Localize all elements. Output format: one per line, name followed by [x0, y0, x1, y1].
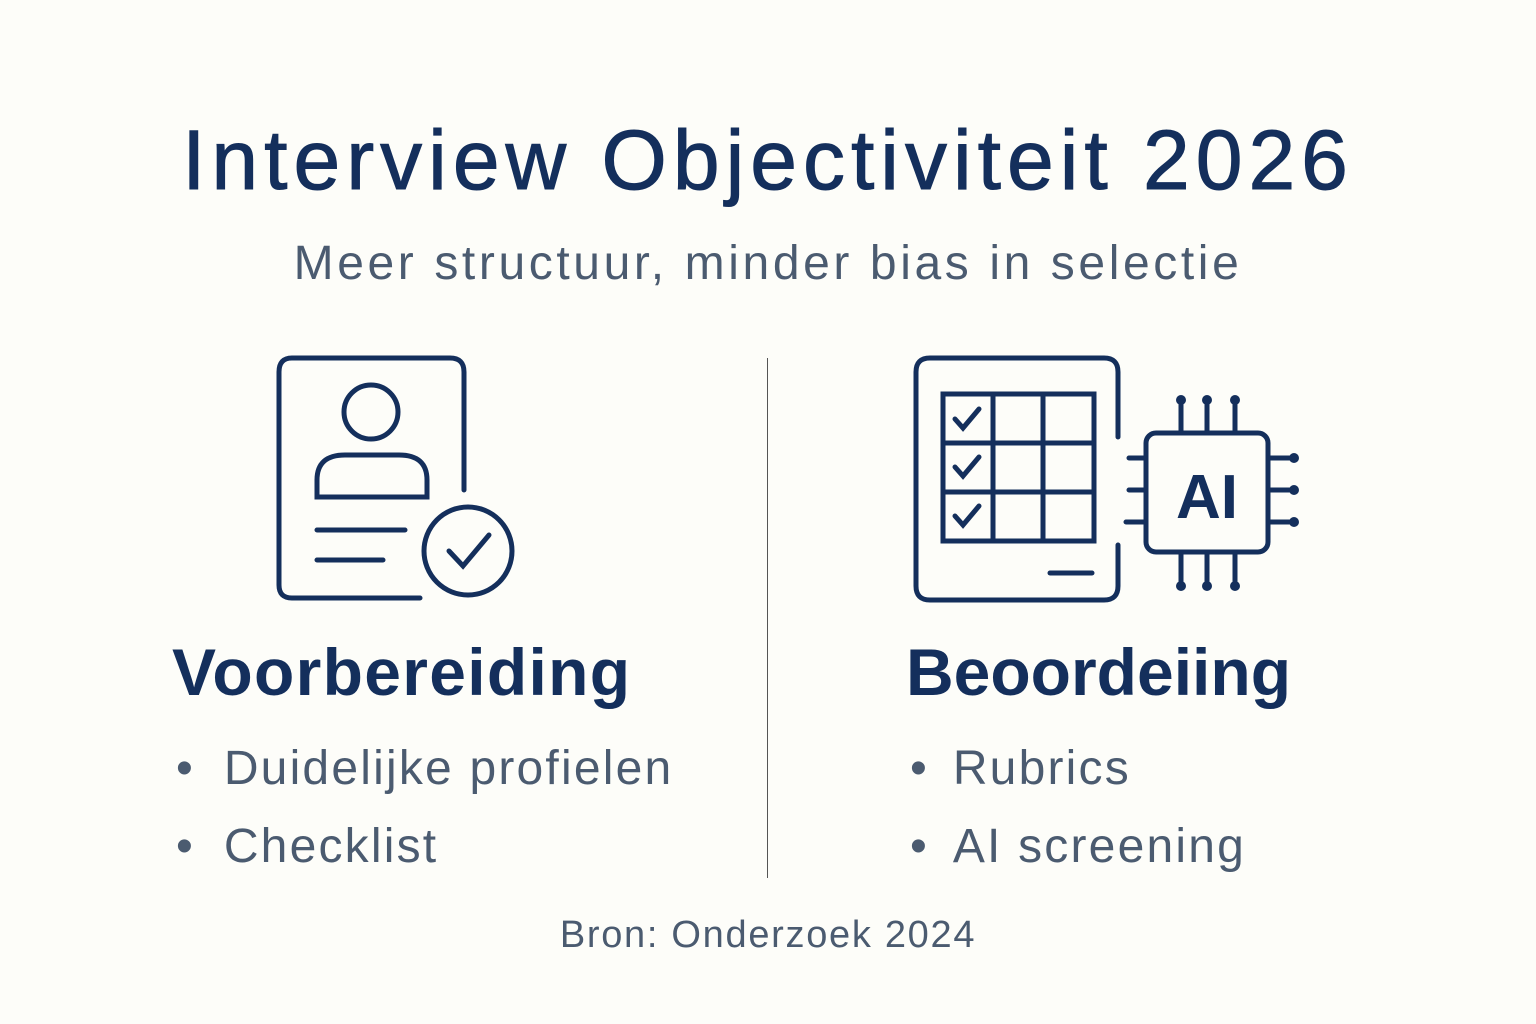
icon: rubric tablet with AI chip	[914, 356, 1299, 602]
list: left	[176, 742, 673, 873]
subtitle: Meer structuur, minder bias in selectie	[294, 237, 1242, 290]
heading: Beoordeiing: Beoordeiing	[906, 635, 1291, 709]
list: right: • Rubrics	[910, 742, 1131, 795]
list: left: • Checklist	[176, 820, 438, 873]
icon: profile document with check	[276, 356, 514, 600]
heading: Voorbereiding: Voorbereiding	[172, 635, 631, 709]
list: left: • Duidelijke profielen	[176, 742, 673, 795]
list: right	[910, 742, 1246, 873]
source: Bron: Onderzoek 2024	[560, 914, 976, 956]
title: Interview Objectiviteit 2026	[182, 113, 1354, 207]
icon: rubric tablet with AI chip: AI	[1176, 463, 1238, 532]
divider	[767, 358, 768, 878]
list: right: • AI screening	[910, 820, 1246, 873]
